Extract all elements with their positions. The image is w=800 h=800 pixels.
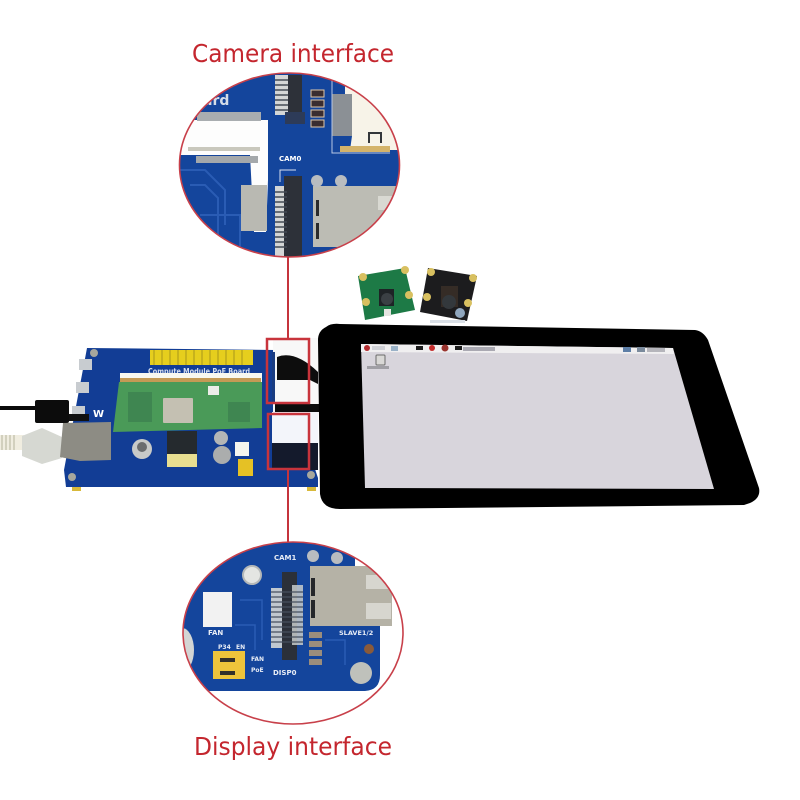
taskbar xyxy=(361,344,674,354)
board title: Compute Module PoE Board xyxy=(148,367,250,376)
lower camera connector xyxy=(275,170,302,258)
title: camera interface: Camera interface xyxy=(192,39,394,68)
ethernet port xyxy=(311,175,401,247)
silkscreen outline xyxy=(332,78,390,153)
black camera module xyxy=(420,268,477,323)
SLAVE label: SLAVE1/2 xyxy=(339,629,373,637)
via xyxy=(364,644,374,654)
green camera module xyxy=(358,266,415,320)
trash icon xyxy=(367,355,389,369)
white connector at top right xyxy=(345,86,398,150)
black USB cable xyxy=(0,400,89,423)
ethernet cable xyxy=(0,428,62,464)
zoom circle: camera interface xyxy=(175,70,405,260)
board traces xyxy=(235,600,345,665)
jumper labels: P34 xyxy=(218,644,231,651)
CAM1 label: CAM1 xyxy=(274,554,297,562)
highlight box: display connector xyxy=(268,414,309,469)
white FPC ribbon connector xyxy=(175,120,268,232)
zoom circle: display interface xyxy=(170,530,403,724)
ethernet jack xyxy=(60,422,111,461)
display connector xyxy=(271,572,303,660)
fan connector xyxy=(203,592,232,627)
taskbar icons xyxy=(364,344,665,352)
FAN label: FAN xyxy=(208,629,223,637)
display xyxy=(318,324,759,509)
DISP0 label: DISP0 xyxy=(273,669,297,677)
compute module xyxy=(113,373,262,432)
screen xyxy=(361,344,714,489)
connector line: camera xyxy=(287,257,289,338)
USB ports xyxy=(72,359,92,416)
upper camera connector xyxy=(275,75,305,124)
connector line: display xyxy=(287,469,289,543)
mounting screws and feet xyxy=(68,349,316,491)
screw xyxy=(350,662,372,684)
CAM0 label: CAM0 xyxy=(279,155,302,163)
board traces xyxy=(180,170,240,250)
capacitor edge xyxy=(184,628,194,665)
metal connector latch xyxy=(241,185,267,231)
mounting hole xyxy=(243,566,261,584)
yellow jumpers xyxy=(213,651,245,679)
capacitors and transformer xyxy=(132,431,253,476)
yellow pin header xyxy=(150,350,253,365)
jumper labels: PoE xyxy=(251,667,264,674)
camera modules xyxy=(358,266,477,323)
resistor row xyxy=(309,632,322,665)
highlight box: camera connector xyxy=(267,339,309,403)
board xyxy=(0,348,318,491)
white logo: W xyxy=(93,409,104,420)
ribbon cables xyxy=(272,338,320,470)
title: display interface: Display interface xyxy=(194,732,392,761)
jumper labels xyxy=(218,644,264,672)
resistor row xyxy=(311,90,324,127)
jumper labels: EN xyxy=(236,644,245,651)
ethernet port xyxy=(307,550,392,626)
silkscreen label: ard xyxy=(203,93,229,109)
jumper labels: FAN xyxy=(251,656,264,663)
